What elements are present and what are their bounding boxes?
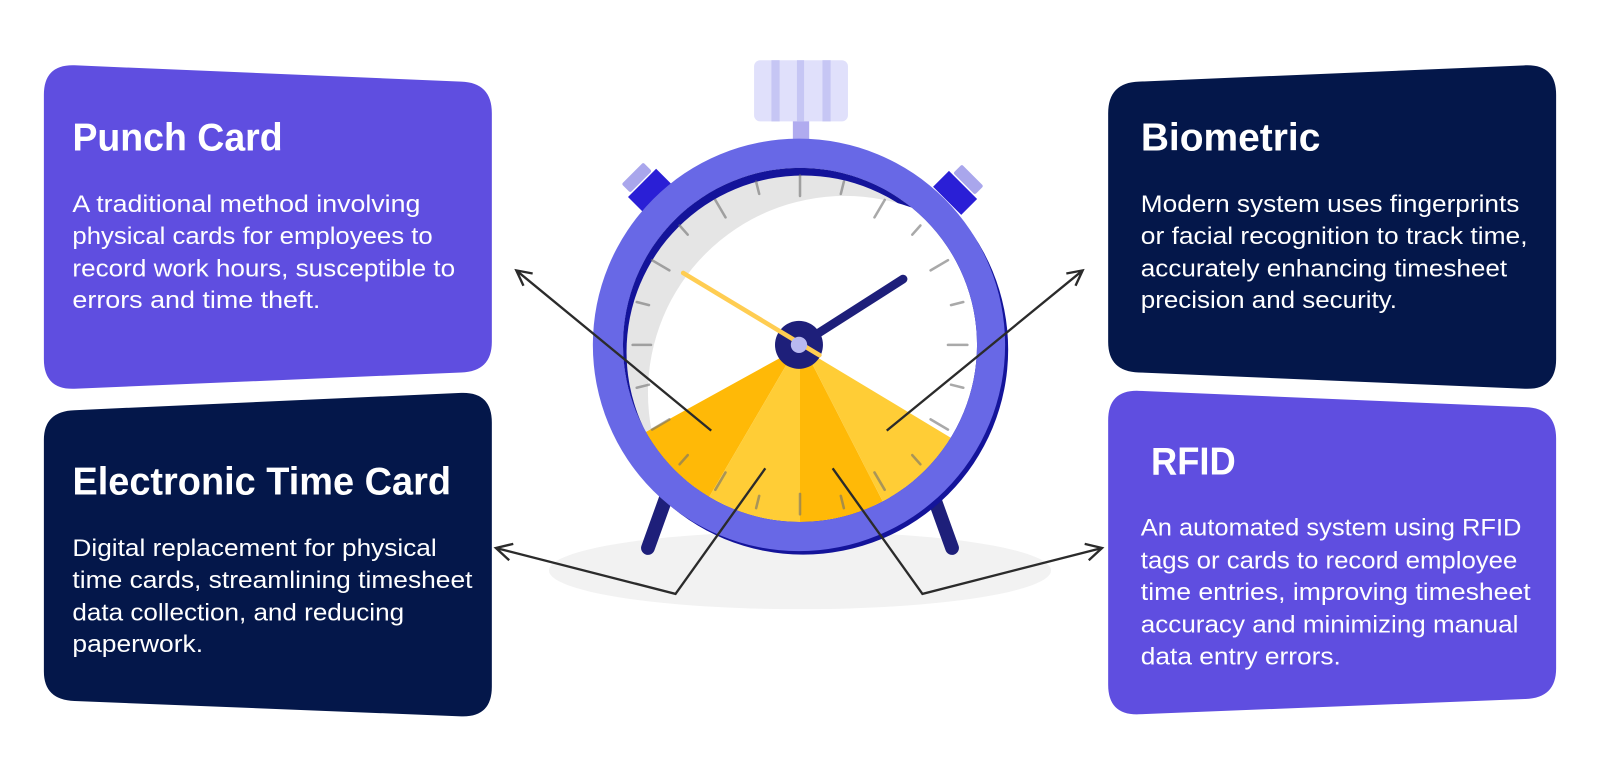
arrow: to rfid [833,468,1102,594]
illustration: stopwatch [549,60,1051,609]
text: biometric description: accurately enhancing timesheet [1141,256,1507,283]
text: rfid description: time entries, improving timesheet [1141,579,1531,606]
text: electronic time card description: time cards, streamlining timesheet [72,567,473,594]
shadow [549,532,1051,609]
yellow sectors [646,358,950,522]
text: biometric description [1141,191,1528,314]
text: punch card description: physical cards for employees to [72,223,433,250]
heading: rfid: RFID [1151,440,1236,483]
panel: electronic time card [44,393,492,716]
text: biometric description: precision and security. [1141,287,1397,314]
text: biometric description: or facial recognition to track time, [1141,223,1528,250]
dial [623,168,977,520]
text: rfid description: accuracy and minimizing manual [1141,612,1518,639]
text: rfid description [1141,515,1531,670]
arrow: to punch card [516,270,711,431]
heading: punch card: Punch Card [72,117,283,160]
text: electronic time card description: Digital replacement for physical [72,535,437,562]
heading: electronic time card: Electronic Time Card [72,460,451,503]
text: electronic time card description: paperwork. [72,631,203,658]
infographic [44,60,1556,716]
arrow: to electronic time card [496,468,765,594]
clock hands [683,273,903,369]
heading: biometric: Biometric [1141,117,1320,160]
text: punch card description: errors and time theft. [72,287,320,314]
text: punch card description: A traditional method involving [72,191,420,218]
side buttons [622,162,984,215]
text: biometric description: Modern system uses fingerprints [1141,191,1519,218]
legs [648,490,952,548]
text: punch card description [72,191,455,314]
text: rfid description: tags or cards to record employee [1141,547,1517,574]
panel: punch card [44,65,492,389]
text: rfid description: An automated system using RFID [1141,515,1521,542]
text: electronic time card description: data collection, and reducing [72,599,404,626]
panel: rfid [1108,391,1556,714]
text: rfid description: data entry errors. [1141,643,1341,670]
tick marks [633,176,967,514]
arrow: to biometric [887,270,1083,431]
crown knob [754,60,848,143]
text: electronic time card description [72,535,473,658]
text: punch card description: record work hours, susceptible to [72,256,455,283]
case ring [593,139,1008,555]
panel: biometric [1108,65,1556,389]
